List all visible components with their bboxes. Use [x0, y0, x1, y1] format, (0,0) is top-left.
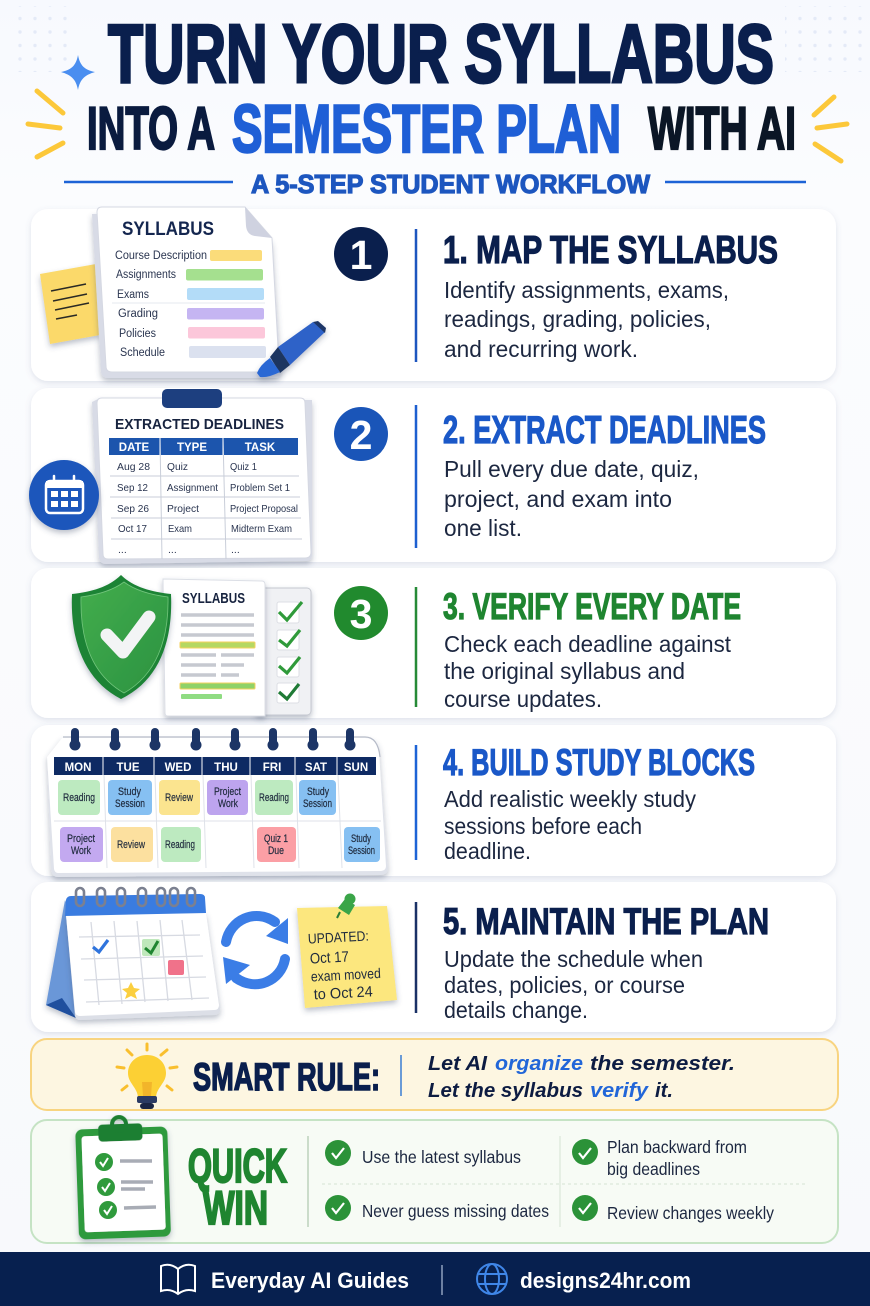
text: step 3 body: the original syllabus and	[444, 658, 685, 684]
study blocks: Session	[303, 798, 332, 810]
heading: step 3: 3. VERIFY EVERY DATE	[443, 586, 741, 627]
icon: sparkle	[61, 55, 95, 90]
text: step 5 body: Update the schedule when	[444, 946, 703, 972]
text: step 4 body: Add realistic weekly study	[444, 786, 696, 812]
illustration: extracted deadlines table: Quiz 1	[230, 461, 257, 473]
heading: quick win: WIN	[203, 1181, 268, 1234]
icon: sticky note	[40, 264, 100, 344]
text: step 2 body	[444, 456, 699, 541]
number badge 2: 2	[350, 412, 372, 458]
illustration: syllabus document: Grading	[118, 308, 158, 320]
illustration: extracted deadlines table: EXTRACTED DEADLINES	[115, 416, 284, 433]
heading: step 1: 1. MAP THE SYLLABUS	[443, 229, 778, 272]
illustration: extracted deadlines table: Aug 28	[117, 461, 150, 473]
illustration: extracted deadlines table: Exam	[168, 523, 192, 535]
text: smart rule: it.	[655, 1080, 673, 1102]
illustration: extracted deadlines table: Oct 17	[118, 523, 147, 535]
subtitle: A 5-STEP STUDENT WORKFLOW	[251, 169, 650, 199]
icon: refresh arrows	[223, 916, 288, 984]
icon: calendar badge	[29, 460, 99, 530]
illustration: extracted deadlines table: Assignment	[167, 482, 218, 494]
text: step 4 body: sessions before each	[444, 813, 642, 839]
text: step 1 body: readings, grading, policies,	[444, 306, 711, 332]
study blocks: Work	[218, 798, 238, 810]
text: smart rule: Let the syllabus	[428, 1080, 583, 1102]
study blocks: Review	[165, 792, 193, 804]
illustration: extracted deadlines table: Sep 26	[117, 503, 149, 515]
illustration: desk calendar	[46, 888, 220, 1020]
illustration: extracted deadlines table: Midterm Exam	[231, 523, 292, 535]
study blocks: Study	[307, 786, 329, 798]
text: step 3 body: course updates.	[444, 686, 602, 712]
text: step 2 body: one list.	[444, 515, 522, 541]
text: step 4 body	[444, 786, 696, 864]
illustration: weekly calendar: WED	[165, 762, 191, 774]
text: step 5 body: dates, policies, or course	[444, 972, 685, 998]
illustration: syllabus document: Policies	[119, 328, 156, 340]
illustration: extracted deadlines table: ...	[118, 544, 127, 556]
sticky note: updated: UPDATED:	[307, 927, 369, 947]
tip: use the latest syllabus: Use the latest syllabus	[362, 1147, 521, 1167]
title	[87, 7, 796, 167]
illustration: weekly calendar: MON	[65, 762, 91, 774]
illustration: weekly calendar: FRI	[263, 762, 281, 774]
footer brand: Everyday AI Guides	[211, 1268, 409, 1293]
illustration: extracted deadlines table	[92, 389, 312, 564]
illustration: syllabus document	[92, 207, 281, 378]
text: step 2 body: Pull every due date, quiz,	[444, 456, 699, 482]
sticky note: updated: exam moved	[310, 965, 381, 985]
panel: step 5	[31, 882, 836, 1032]
calendar rings	[70, 728, 356, 750]
text: step 1 body: and recurring work.	[444, 336, 638, 362]
illustration: weekly calendar: TUE	[116, 762, 140, 774]
sticky note: updated	[297, 906, 397, 1008]
tip: use the latest syllabus	[325, 1140, 521, 1167]
icon: shield	[72, 575, 171, 699]
illustration: extracted deadlines table: Problem Set 1	[230, 482, 290, 494]
icon: push pin	[337, 894, 356, 918]
number badge 2	[334, 407, 388, 461]
illustration: extracted deadlines table: DATE	[119, 442, 150, 454]
illustration: extracted deadlines table: ...	[168, 544, 177, 556]
icon: clipboard	[75, 1115, 171, 1240]
illustration: checklist panel	[255, 588, 311, 715]
study blocks	[58, 780, 380, 862]
text: step 1 body	[444, 277, 729, 362]
text: step 5 body	[444, 946, 703, 1023]
study blocks: Review	[117, 839, 145, 851]
tip: plan backward: Plan backward from	[607, 1137, 747, 1157]
illustration: syllabus document: Course Description	[115, 250, 207, 262]
text: step 2 body: project, and exam into	[444, 486, 672, 512]
illustration: weekly calendar: SUN	[344, 762, 368, 774]
heading: step 5: 5. MAINTAIN THE PLAN	[443, 901, 769, 942]
panel: step 1	[31, 207, 836, 381]
panel: step 3	[31, 568, 836, 718]
panel: step 2	[29, 388, 836, 564]
heading: quick win	[188, 1139, 287, 1234]
illustration: extracted deadlines table: ...	[231, 544, 240, 556]
icon: book	[161, 1265, 195, 1294]
study blocks: Quiz 1	[264, 833, 288, 845]
study blocks: Reading	[259, 792, 289, 804]
footer website: designs24hr.com	[520, 1268, 691, 1293]
illustration: syllabus sheet: SYLLABUS	[182, 591, 245, 607]
illustration: extracted deadlines table: Project Proposal	[230, 503, 298, 515]
illustration: syllabus document: Exams	[117, 289, 149, 301]
illustration: syllabus document: Schedule	[120, 347, 165, 359]
illustration: syllabus document: SYLLABUS	[122, 219, 214, 240]
illustration: weekly calendar	[47, 728, 388, 877]
study blocks: Due	[268, 845, 284, 857]
text: step 3 body	[444, 631, 731, 712]
study blocks: Reading	[63, 792, 95, 804]
illustration: syllabus document: Assignments	[116, 269, 176, 281]
number badge 1	[334, 227, 388, 281]
sticky note: updated: Oct 17	[309, 949, 349, 968]
title highlight: SEMESTER PLAN	[232, 91, 621, 167]
study blocks: Reading	[165, 839, 195, 851]
study blocks: Study	[351, 833, 371, 845]
footer	[0, 1252, 870, 1306]
sticky note: updated: to Oct 24	[313, 983, 373, 1003]
icon: right rays	[814, 97, 847, 161]
icon: marker	[257, 321, 326, 377]
tip: plan backward	[572, 1137, 747, 1179]
title line 2 end: WITH AI	[648, 95, 796, 162]
tip: never guess missing dates	[325, 1195, 549, 1221]
title line 2 start: INTO A	[87, 95, 215, 162]
number badge 3: 3	[350, 591, 372, 637]
text: smart rule	[428, 1053, 735, 1102]
panel: step 4	[31, 725, 836, 877]
number badge 3	[334, 586, 388, 640]
study blocks: Work	[71, 845, 91, 857]
illustration: weekly calendar: THU	[214, 762, 238, 774]
illustration: extracted deadlines table: TYPE	[177, 442, 207, 454]
illustration: weekly calendar: SAT	[305, 762, 327, 774]
study blocks: Project	[214, 786, 241, 798]
illustration: syllabus sheet	[163, 579, 265, 716]
text: step 4 body: deadline.	[444, 838, 531, 864]
text: step 1 body: Identify assignments, exams,	[444, 277, 729, 303]
text: step 3 body: Check each deadline against	[444, 631, 731, 657]
study blocks: Project	[67, 833, 95, 845]
text: step 5 body: details change.	[444, 997, 588, 1023]
illustration: extracted deadlines table: Quiz	[167, 461, 188, 473]
tip: review changes: Review changes weekly	[607, 1203, 774, 1223]
tip: never guess missing dates: Never guess missing dates	[362, 1201, 549, 1221]
tip: plan backward: big deadlines	[607, 1159, 700, 1179]
illustration: extracted deadlines table: Sep 12	[117, 482, 148, 494]
text: smart rule: Let AI	[428, 1053, 487, 1075]
text: smart rule: the semester.	[590, 1053, 735, 1075]
illustration: extracted deadlines table: Project	[167, 503, 199, 515]
icon: light bulb	[117, 1044, 177, 1109]
icon: globe	[477, 1264, 507, 1294]
panel: quick win	[31, 1115, 838, 1243]
study blocks: Session	[348, 845, 375, 857]
number badge 1: 1	[350, 232, 372, 278]
heading: quick win: QUICK	[188, 1139, 287, 1192]
text: smart rule: verify	[590, 1080, 649, 1102]
study blocks: Session	[115, 798, 145, 810]
study blocks: Study	[118, 786, 141, 798]
tip: review changes	[572, 1195, 774, 1223]
icon: left rays	[28, 91, 63, 157]
heading: smart rule: SMART RULE:	[193, 1056, 380, 1099]
panel: smart rule	[31, 1039, 838, 1110]
illustration: extracted deadlines table: TASK	[245, 442, 276, 454]
text: smart rule: organize	[495, 1053, 583, 1075]
